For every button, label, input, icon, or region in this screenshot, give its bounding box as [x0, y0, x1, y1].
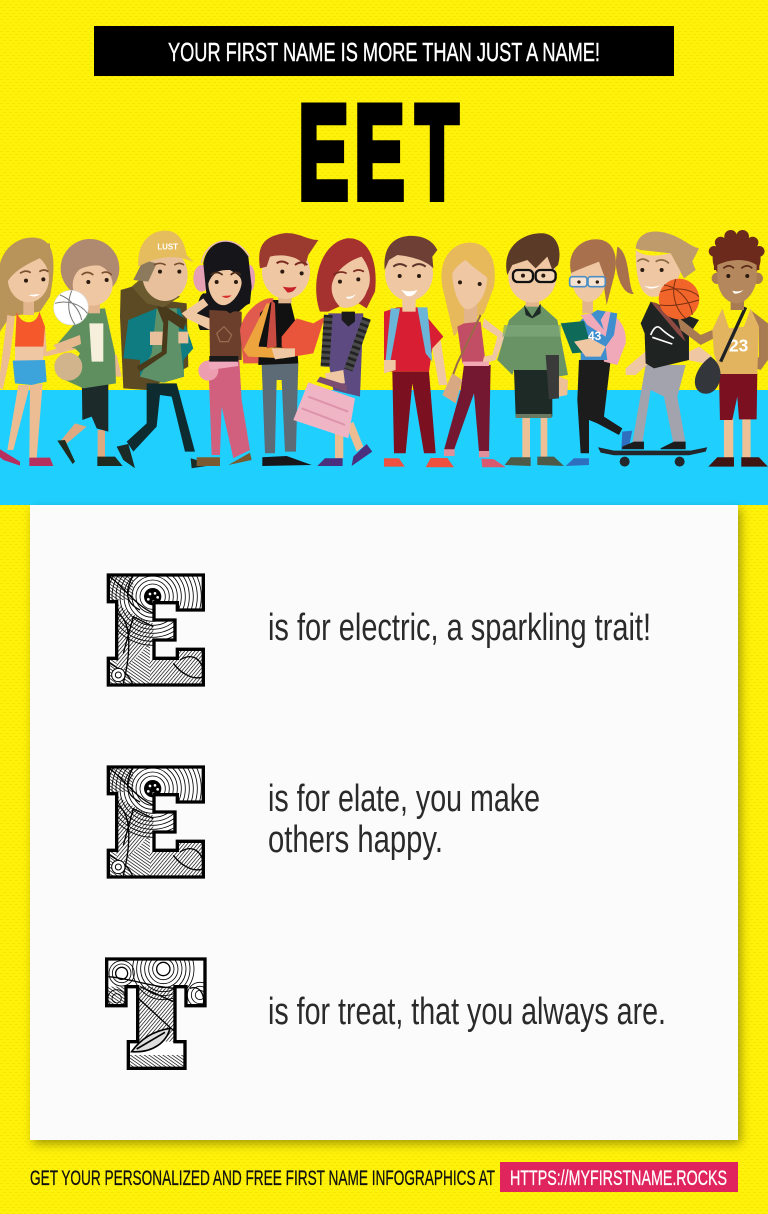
title: name: E	[354, 79, 404, 227]
person 9: boy with glasses	[497, 233, 568, 466]
person 4: girl with headphones	[182, 241, 255, 466]
person 8: blonde girl	[441, 243, 506, 467]
header bar: YOUR FIRST NAME IS MORE THAN JUST A NAME!	[168, 37, 600, 67]
person 2: girl with volleyball	[53, 239, 123, 466]
icon: letter E ornamental (row 2)	[106, 765, 205, 879]
person 5: boy reading book	[240, 233, 325, 466]
footer link badge	[500, 1162, 738, 1192]
text: second E lines: is for elate, you make	[268, 778, 540, 820]
person 6: girl with pink bag	[293, 238, 376, 466]
title: name	[298, 79, 458, 227]
person 3: hiker with cap and backpack: LUST	[157, 241, 179, 251]
person 10: girl with tablet and ponytail	[561, 239, 634, 466]
header bar	[94, 26, 674, 76]
icon: letter T ornamental (row 3)	[105, 957, 207, 1070]
title: name: E	[298, 79, 348, 227]
person 12: boy in yellow jersey: 23	[729, 336, 749, 356]
panel: white content card	[30, 505, 738, 1140]
person 12: boy in yellow jersey	[695, 230, 768, 467]
person 10: girl with tablet and ponytail: 43	[588, 329, 602, 343]
text: E line: is for electric, a sparkling trait!	[268, 607, 651, 649]
illustration: group of students right half	[384, 230, 768, 467]
person 3: hiker with cap and backpack	[117, 231, 213, 468]
icon: letter E ornamental (row 1)	[106, 573, 205, 687]
blue floor band	[0, 390, 768, 505]
illustration: group of students left half	[0, 231, 376, 468]
text: second E lines: others happy.	[268, 819, 443, 861]
person 7: boy in red shirt	[384, 236, 454, 467]
person 11: skateboarder with basketball	[598, 231, 717, 467]
title: name: T	[416, 79, 458, 227]
text: second E lines	[268, 778, 540, 861]
person 1: girl in orange top	[0, 238, 80, 466]
footer call to action: GET YOUR PERSONALIZED AND FREE FIRST NAME INFOGRAPHICS AT	[30, 1167, 495, 1190]
